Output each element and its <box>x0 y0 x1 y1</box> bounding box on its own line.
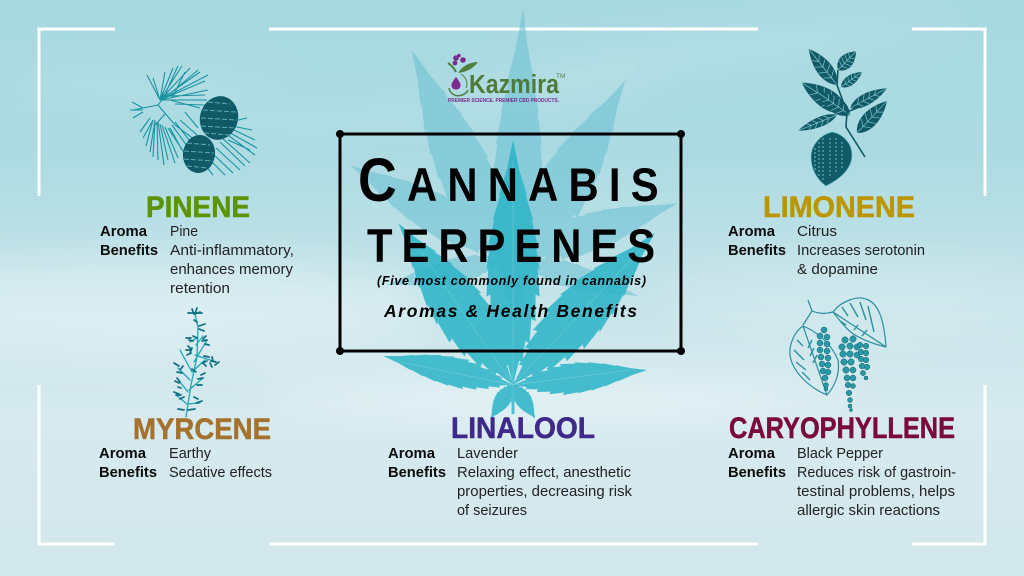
labels: Aroma <box>728 224 776 240</box>
values: of seizures <box>457 503 527 519</box>
icon: lemon branch <box>796 44 893 186</box>
heading: CARYOPHYLLENE <box>729 412 955 445</box>
panel: pinene <box>100 191 294 297</box>
heading: LINALOOL <box>451 412 595 445</box>
pepper berries <box>817 327 870 412</box>
icon: pine branch with cones <box>130 66 257 175</box>
labels: Benefits <box>99 465 157 481</box>
labels: Aroma <box>99 446 147 462</box>
heading: LIMONENE <box>763 191 915 224</box>
pepper leaves <box>790 298 886 395</box>
values: enhances memory <box>170 262 294 278</box>
icon: thyme sprig <box>174 308 219 417</box>
values: Earthy <box>169 446 212 462</box>
panel: linalool <box>388 412 633 519</box>
values <box>170 224 294 297</box>
labels <box>728 446 786 481</box>
icon: black pepper branch <box>790 298 886 412</box>
values: Increases serotonin <box>797 243 925 259</box>
logo trademark: TM <box>556 73 565 80</box>
title box <box>336 130 685 355</box>
logo tagline: PREMIER SCIENCE. PREMIER CBD PRODUCTS. <box>448 98 560 104</box>
labels: Aroma <box>388 446 436 462</box>
values: Lavender <box>457 446 518 462</box>
values <box>457 446 633 519</box>
panel: limonene <box>728 191 925 278</box>
subtitle: (Five most commonly found in cannabis) <box>377 274 646 288</box>
labels: Benefits <box>728 465 786 481</box>
labels: Benefits <box>388 465 446 481</box>
values <box>797 446 956 519</box>
values <box>169 446 272 481</box>
title line 2: TERPENES <box>367 220 664 273</box>
values <box>797 224 925 278</box>
heading: PINENE <box>146 191 250 224</box>
labels <box>99 446 157 481</box>
logo leaves and swirl <box>448 62 478 96</box>
values: Citrus <box>797 224 837 240</box>
values: Pine <box>170 224 198 240</box>
panel: myrcene <box>99 413 272 481</box>
values: retention <box>170 281 230 297</box>
labels <box>100 224 158 259</box>
labels: Benefits <box>100 243 158 259</box>
labels <box>728 224 786 259</box>
values: allergic skin reactions <box>797 503 940 519</box>
labels: Benefits <box>728 243 786 259</box>
values: Reduces risk of gastroin- <box>797 465 956 481</box>
logo: Kazmira <box>448 54 565 104</box>
cannabis leaf, saturated front layer <box>376 140 675 423</box>
cannabis leaf, pale back layer <box>339 7 684 331</box>
heading: MYRCENE <box>133 413 271 446</box>
tagline: Aromas & Health Benefits <box>383 301 637 321</box>
values: Black Pepper <box>797 446 883 462</box>
values: Relaxing effect, anesthetic <box>457 465 631 481</box>
values: properties, decreasing risk <box>457 484 633 500</box>
values: testinal problems, helps <box>797 484 955 500</box>
labels: Aroma <box>728 446 776 462</box>
title line 1: CANNABIS <box>358 147 669 215</box>
logo flowers <box>453 54 466 65</box>
logo wordmark: Kazmira <box>469 71 560 99</box>
labels <box>388 446 446 481</box>
logo purple drop <box>452 77 460 90</box>
values: Anti-inflammatory, <box>170 243 294 259</box>
panel: caryophyllene <box>728 412 956 519</box>
labels: Aroma <box>100 224 148 240</box>
values: & dopamine <box>797 262 878 278</box>
values: Sedative effects <box>169 465 272 481</box>
